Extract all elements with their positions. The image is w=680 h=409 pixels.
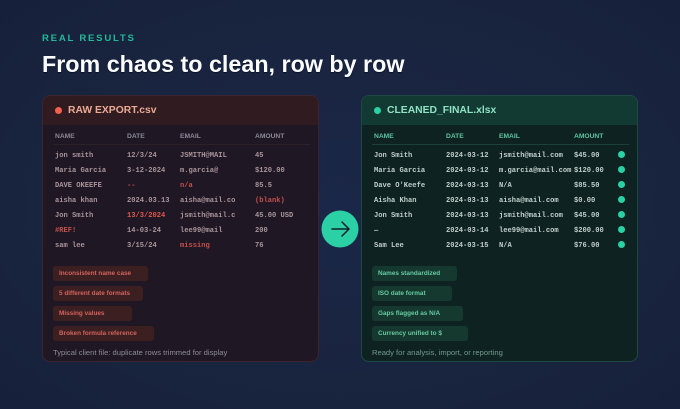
table: cleaned data: —	[374, 227, 378, 235]
table: cleaned data: DATE	[446, 133, 464, 140]
table: raw data	[53, 133, 310, 250]
table: raw data: 14-03-24	[127, 227, 161, 235]
footnote: raw: Typical client file: duplicate rows trimmed for display	[53, 348, 227, 357]
filename: cleaned final: CLEANED_FINAL.xlsx	[387, 105, 496, 116]
table: raw data: aisha khan	[55, 197, 98, 205]
tag: date formats: 5 different date formats	[59, 290, 130, 297]
table: raw data: jon smith	[55, 152, 93, 160]
table: raw data: 45.00 USD	[255, 212, 293, 220]
table: cleaned data: $45.00	[574, 212, 600, 220]
tag: currency unified	[372, 326, 468, 341]
table: raw data: 3/15/24	[127, 242, 157, 250]
table: cleaned data: 2024-03-12	[446, 152, 489, 160]
table: cleaned data: $76.00	[574, 242, 600, 250]
panel: cleaned final	[361, 95, 638, 362]
table: raw data: Maria Garcia	[55, 167, 106, 175]
table: raw data: sam lee	[55, 242, 85, 250]
table: cleaned data: m.garcia@mail.com	[499, 167, 571, 175]
table: cleaned data: Jon Smith	[374, 152, 412, 160]
table: cleaned data: Maria Garcia	[374, 167, 425, 175]
table: raw data: EMAIL	[180, 133, 201, 140]
table: cleaned data: N/A	[499, 242, 512, 250]
tag: date formats	[53, 286, 143, 301]
table: cleaned data: Dave O'Keefe	[374, 182, 425, 190]
tag: missing values	[53, 306, 132, 321]
tag: names standardized: Names standardized	[378, 270, 440, 277]
eyebrow: real results: REAL RESULTS	[42, 33, 136, 44]
table: raw data: AMOUNT	[255, 133, 284, 140]
tag: broken formula: Broken formula reference	[59, 330, 137, 337]
table: cleaned data: AMOUNT	[574, 133, 603, 140]
tag: gaps flagged: Gaps flagged as N/A	[378, 310, 440, 317]
table: raw data: 2024.03.13	[127, 197, 170, 205]
table: cleaned data: lee99@mail.com	[499, 227, 559, 235]
table: cleaned data: $0.00	[574, 197, 595, 205]
table: cleaned data: jsmith@mail.com	[499, 152, 563, 160]
table: cleaned data: EMAIL	[499, 133, 520, 140]
table: cleaned data: $120.00	[574, 167, 604, 175]
table: raw data: DAVE OKEEFE	[55, 182, 102, 190]
filename: raw export: RAW EXPORT.csv	[68, 105, 157, 116]
footnote: clean: Ready for analysis, import, or reporting	[372, 348, 503, 357]
icon: red status dot	[55, 107, 62, 114]
tag: inconsistent name case: Inconsistent name case	[59, 270, 131, 277]
table: raw data: 200	[255, 227, 268, 235]
table: cleaned data: 2024-03-12	[446, 167, 489, 175]
table: cleaned data: aisha@mail.com	[499, 197, 559, 205]
title: From chaos to clean, row by row	[42, 51, 404, 77]
table: raw data: 12/3/24	[127, 152, 157, 160]
table: cleaned data: Sam Lee	[374, 242, 404, 250]
table: raw data: 85.5	[255, 182, 272, 190]
table: raw data: (blank)	[255, 197, 285, 205]
table: raw data: missing	[180, 242, 210, 250]
panel header: raw export	[43, 96, 318, 125]
tag: iso date format: ISO date format	[378, 290, 426, 297]
table: raw data: lee99@mail	[180, 227, 223, 235]
tag: inconsistent name case	[53, 266, 148, 281]
table: cleaned data: 2024-03-13	[446, 197, 489, 205]
table: raw data: 76	[255, 242, 264, 250]
table: raw data: --	[127, 182, 136, 190]
table: raw data: aisha@mail.co	[180, 197, 235, 205]
table: cleaned data: 2024-03-13	[446, 212, 489, 220]
table: raw data: m.garcia@	[180, 167, 218, 175]
table: cleaned data: $45.00	[574, 152, 600, 160]
table: cleaned data: N/A	[499, 182, 512, 190]
tag: gaps flagged	[372, 306, 463, 321]
table: raw data: $120.00	[255, 167, 285, 175]
table: cleaned data	[372, 133, 629, 250]
panel: raw export	[42, 95, 319, 362]
table: raw data: DATE	[127, 133, 145, 140]
table: raw data: NAME	[55, 133, 75, 140]
table: raw data: 3-12-2024	[127, 167, 165, 175]
tag: names standardized	[372, 266, 457, 281]
table: raw data: #REF!	[55, 227, 76, 235]
table: cleaned data: 2024-03-13	[446, 182, 489, 190]
panel header: cleaned final	[362, 96, 637, 125]
icon: green status dot	[374, 107, 381, 114]
table: cleaned data: Aisha Khan	[374, 197, 417, 205]
table: raw data: JSMITH@MAIL	[180, 152, 227, 160]
table: cleaned data: 2024-03-15	[446, 242, 489, 250]
table: raw data: Jon Smith	[55, 212, 93, 220]
tag: currency unified: Currency unified to $	[378, 330, 442, 337]
tag: missing values: Missing values	[59, 310, 104, 317]
table: raw data: n/a	[180, 182, 193, 190]
tag: broken formula	[53, 326, 154, 341]
table: raw data: jsmith@mail.c	[180, 212, 235, 220]
table: cleaned data: Jon Smith	[374, 212, 412, 220]
table: cleaned data: NAME	[374, 133, 394, 140]
table: cleaned data: $85.50	[574, 182, 600, 190]
table: raw data: 13/3/2024	[127, 212, 165, 220]
tag: iso date format	[372, 286, 452, 301]
table: cleaned data: jsmith@mail.com	[499, 212, 563, 220]
table: cleaned data: $200.00	[574, 227, 604, 235]
table: raw data: 45	[255, 152, 264, 160]
table: cleaned data: 2024-03-14	[446, 227, 489, 235]
icon: arrow button	[322, 210, 358, 248]
